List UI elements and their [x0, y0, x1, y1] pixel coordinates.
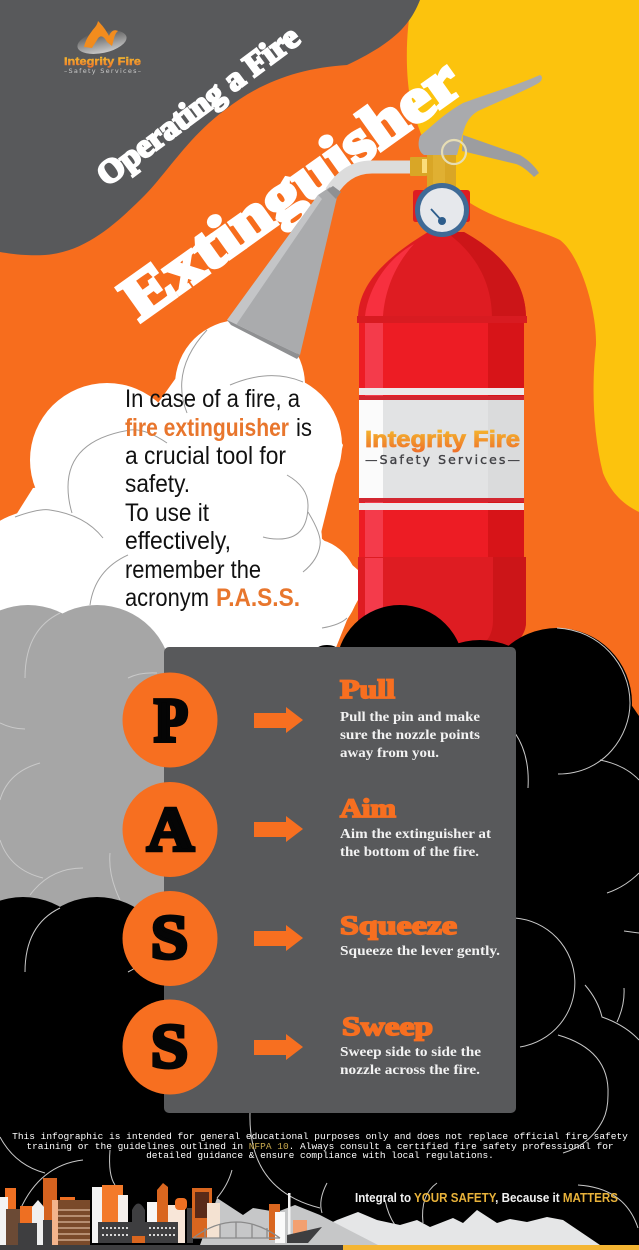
- grey smoke body: [0, 675, 175, 935]
- cloud contour lines: [15, 330, 347, 628]
- S badge: [122, 891, 218, 986]
- S letter: S: [151, 1013, 188, 1081]
- disclaimer: [12, 1131, 628, 1161]
- intro line 2 highlight: fire extinguisher: [125, 414, 289, 442]
- S description: [340, 1045, 481, 1078]
- S heading: Sweep: [342, 1011, 433, 1041]
- nozzle collar: [327, 186, 341, 199]
- dome band: [357, 316, 527, 323]
- black smoke contours: [0, 628, 639, 1228]
- disclaimer: training or the guidelines outlined in NFPA 10. Always consult a certified fire safety professional for: [26, 1141, 614, 1152]
- title: Extinguisher: Extinguisher: [107, 45, 473, 333]
- label highlight: [359, 400, 383, 498]
- A description: [340, 827, 491, 860]
- intro line 8: acronym: [125, 584, 209, 612]
- intro text block: [125, 385, 312, 612]
- S letter: S: [151, 904, 188, 972]
- white extinguishing cloud: [0, 320, 358, 670]
- grey smoke contours: [0, 613, 157, 900]
- base left highlight: [365, 558, 383, 628]
- dome left highlight: [365, 244, 414, 316]
- panel: P.A.S.S. steps: [122, 647, 516, 1113]
- cloud puff right: [200, 374, 342, 516]
- upper red line: [359, 396, 524, 400]
- cloud puff left low: [0, 510, 120, 670]
- gauge face: [420, 188, 464, 232]
- A letter: A: [147, 796, 194, 864]
- A description: Aim the extinguisher at: [340, 827, 491, 842]
- neck: [427, 155, 456, 191]
- step A: [122, 782, 491, 877]
- city skyline footer: [0, 1178, 639, 1250]
- capitol building: [98, 1204, 178, 1243]
- logo: [64, 21, 141, 75]
- far grey mountain: [200, 1198, 378, 1245]
- bridge: [193, 1222, 280, 1238]
- connector highlight: [422, 159, 427, 173]
- neck shade: [433, 155, 445, 191]
- intro line 2 end: is: [296, 414, 312, 442]
- black smoke: [0, 605, 639, 1250]
- P description: away from you.: [340, 746, 439, 761]
- P description: Pull the pin and make: [340, 710, 480, 725]
- A badge: [122, 782, 218, 877]
- skyline buildings: [0, 1178, 307, 1245]
- black puff behind panel: [336, 605, 464, 733]
- footer dark band: [0, 1245, 343, 1250]
- cloud body: [0, 375, 358, 650]
- lever lower: [462, 135, 539, 177]
- intro line 5: To use it: [125, 499, 209, 527]
- intro line 1: In case of a fire, a: [125, 385, 300, 413]
- intro line 3: a crucial tool for: [125, 442, 286, 470]
- body right shade: [488, 323, 524, 563]
- S arrow: [254, 925, 303, 951]
- grey puff right: [22, 605, 172, 755]
- intro line 4: safety.: [125, 470, 190, 498]
- black puff small: [405, 640, 555, 790]
- black right field: [500, 700, 639, 960]
- grey smoke: [0, 605, 175, 935]
- black puff left: [0, 897, 98, 1047]
- title: Operating a Fire: Operating a Fire: [90, 19, 307, 193]
- background: yellow flame shape: [407, 0, 639, 512]
- gauge bracket: [413, 190, 470, 222]
- S arrow: [254, 1034, 303, 1060]
- dome right shade: [446, 232, 526, 318]
- label shade: [488, 400, 524, 498]
- panel background: [164, 647, 516, 1113]
- P letter: P: [154, 687, 188, 755]
- disclaimer: This infographic is intended for general educational purposes only and does not replace official fire safety: [12, 1131, 628, 1142]
- A heading: Aim: [340, 793, 396, 823]
- label plate: [359, 400, 524, 498]
- P arrow: [254, 707, 303, 733]
- nozzle lit edge: [227, 195, 322, 325]
- background: dark grey corner shape: [0, 0, 420, 255]
- label wordmark: Integrity Fire: [365, 426, 520, 452]
- hose connector: [410, 157, 427, 176]
- gauge bezel: [415, 183, 469, 237]
- S heading: Squeeze: [340, 910, 457, 940]
- logo tagline: –Safety Services–: [64, 67, 141, 75]
- A arrow: [254, 816, 303, 842]
- pin ring: [442, 140, 466, 164]
- tank base: [358, 557, 526, 647]
- S badge: [122, 1000, 218, 1094]
- lower red line: [359, 498, 524, 502]
- lower stripe: [359, 503, 524, 510]
- step P: [122, 672, 481, 768]
- black puff mid-left: [22, 897, 172, 1047]
- P badge: [122, 672, 218, 768]
- gauge needle: [431, 209, 442, 221]
- black lower field: [0, 965, 639, 1250]
- step S: squeeze: [122, 891, 500, 986]
- tank body: [359, 323, 524, 563]
- S description: Sweep side to side the: [340, 1045, 481, 1060]
- body left highlight: [365, 323, 383, 563]
- tank dome: [358, 232, 526, 318]
- upper stripe: [359, 388, 524, 395]
- tagline: Integral to YOUR SAFETY, Because it MATTERS: [355, 1190, 618, 1205]
- base right shade: [480, 557, 526, 647]
- cloud puff left: [30, 383, 184, 537]
- P heading: Pull: [340, 674, 395, 704]
- logo wordmark: Integrity Fire: [64, 56, 141, 68]
- label tagline: —Safety Services—: [365, 452, 520, 467]
- footer yellow band: [343, 1245, 639, 1250]
- hose: [331, 167, 411, 192]
- disclaimer: detailed guidance & ensure compliance with local regulations.: [146, 1150, 494, 1161]
- cloud puff top: [175, 320, 305, 450]
- step S: sweep: [122, 1000, 481, 1094]
- nozzle lower rim: [227, 320, 300, 359]
- intro line 6: effectively,: [125, 527, 231, 555]
- logo flame: [84, 21, 118, 48]
- lever upper: [419, 75, 542, 155]
- fire extinguisher illustration: [331, 75, 542, 647]
- P description: sure the nozzle points: [340, 728, 481, 743]
- intro acronym highlight: P.A.S.S.: [216, 584, 300, 612]
- intro line 7: remember the: [125, 556, 261, 584]
- S description: Squeeze the lever gently.: [340, 944, 500, 959]
- nozzle: [227, 186, 341, 359]
- S description: nozzle across the fire.: [340, 1063, 480, 1078]
- P description: [340, 710, 481, 761]
- cloud puff right low: [258, 538, 358, 638]
- A description: the bottom of the fire.: [340, 845, 479, 860]
- gauge hub: [438, 217, 446, 225]
- black middle field: [160, 900, 639, 970]
- black puff right: [482, 628, 632, 778]
- white mountains: [320, 1210, 600, 1245]
- logo ellipse: [75, 26, 129, 58]
- cloud puff right mid: [202, 480, 322, 600]
- grey puff left: [0, 605, 103, 755]
- sail structure: [287, 1227, 322, 1243]
- nozzle cone: [227, 187, 338, 355]
- black bump small left: [316, 645, 338, 655]
